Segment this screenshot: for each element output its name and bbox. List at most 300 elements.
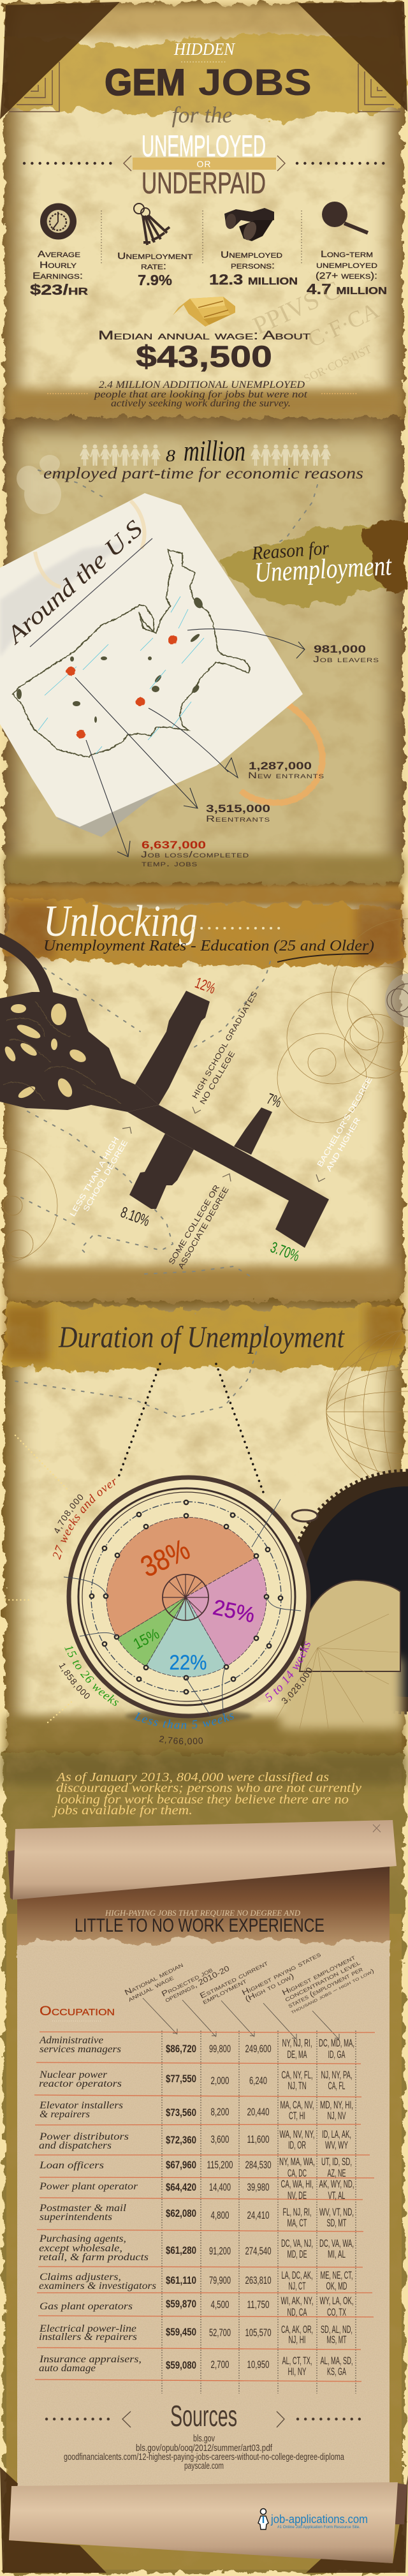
scroll left edge back — [8, 1850, 15, 1900]
row: administrative services managers: DC, MD, MA, — [319, 2037, 354, 2049]
heading: unlocking: Unlocking — [43, 897, 198, 946]
bar: 12 percent tooth — [135, 991, 210, 1105]
row: purchasing agents: 91,200 — [209, 2245, 231, 2257]
separators — [101, 211, 302, 263]
value: 3.70 percent: 3.70% — [268, 1239, 302, 1265]
heading: reason for: Reason for — [251, 538, 330, 564]
row: nuclear power reactor operators: CA, FL — [328, 2080, 346, 2092]
row: administrative services managers: 249,600 — [245, 2043, 272, 2055]
trail: dashed marks — [21, 961, 270, 1279]
row: nuclear power reactor operators: 6,240 — [249, 2075, 267, 2087]
stat: unemployment rate: Unemployment — [117, 251, 193, 262]
label: reentrants — [206, 803, 270, 824]
decoration: faint latin inscription: SOR·COS·IIST — [302, 343, 374, 385]
source list: bls.gov/opub/ooq/2012/summer/art03.pdf — [136, 2443, 273, 2454]
stat: average hourly earnings — [30, 249, 89, 298]
label: less than 5 weeks: Less than 5 weeks — [134, 1712, 234, 1729]
icon: people right — [251, 445, 331, 466]
row: nuclear power reactor operators: NJ, NY, PA, — [321, 2069, 352, 2081]
label: bachelor's degree: BACHELOR'S DEGREE — [315, 1076, 374, 1169]
label: new entrants: 1,287,000 — [249, 760, 312, 772]
row: insurance appraisers: $59,080 — [166, 2359, 196, 2371]
pie slice: 22 percent — [146, 1597, 226, 1677]
number: 8: 8 — [166, 447, 175, 465]
row: power distributors and dispatchers: WA, NV, NY, — [279, 2128, 315, 2140]
label: high school graduates: HIGH SCHOOL GRADUATES — [190, 989, 259, 1100]
row: power distributors and dispatchers: Power distributors — [39, 2131, 129, 2142]
row: insurance appraisers — [39, 2354, 353, 2378]
label: some college: SOME COLLEGE OR — [167, 1183, 221, 1266]
row: gas plant operators: Gas plant operators — [40, 2301, 133, 2312]
logo wordmark: job-applications.com — [270, 2513, 368, 2526]
row: purchasing agents: DC, VA, WA, — [319, 2237, 354, 2249]
trail: dashed marks — [15, 1321, 266, 1418]
column header: paying states — [240, 1950, 322, 2004]
row: claims adjusters: 263,810 — [245, 2274, 272, 2286]
decoration: left corner fold — [0, 2, 120, 119]
stat: long-term unemployed: 4.7 million — [307, 281, 387, 297]
decoration: globe grid — [326, 1330, 408, 1493]
row: gas plant operators: WY, LA, OK, — [320, 2295, 353, 2307]
label: reentrants: 3,515,000 — [206, 803, 270, 815]
title: underpaid: UNDERPAID — [142, 166, 266, 200]
column header: paying states: (High to low) — [244, 1971, 295, 2004]
row: power plant operator: Power plant operator — [39, 2181, 138, 2192]
divider: dotted right — [297, 162, 384, 165]
row: claims adjusters: LA, DC, AK, — [282, 2269, 312, 2281]
row: claims adjusters: 79,900 — [209, 2274, 231, 2286]
icon: gold bars — [173, 297, 235, 327]
note stain — [35, 501, 145, 587]
column header: wage: annual wage — [126, 1973, 175, 2004]
row: power distributors and dispatchers: 3,600 — [210, 2133, 229, 2145]
stat: long-term unemployed: unemployed — [316, 260, 377, 270]
title: hidden: HIDDEN — [173, 40, 236, 59]
row: purchasing agents: Purchasing agents, — [39, 2233, 126, 2244]
key bow — [0, 938, 159, 1112]
label: some college: ASSOCIATE DEGREE — [176, 1185, 231, 1271]
panel: unlocking education rates — [0, 897, 408, 1279]
row: postmaster and mail superintendents: superintendents — [40, 2212, 112, 2223]
row: insurance appraisers: 10,950 — [247, 2358, 269, 2371]
key bars chart — [0, 938, 329, 1248]
row: insurance appraisers: 2,700 — [210, 2358, 229, 2371]
row: claims adjusters: ME, NE, CT, — [320, 2269, 353, 2281]
stat: average hourly earnings: Average — [38, 249, 80, 260]
row: loan officers — [39, 2156, 352, 2179]
stat: unemployed persons: persons: — [231, 260, 275, 271]
column rules — [162, 2031, 356, 2394]
label: new entrants: New entrants — [248, 771, 324, 780]
panel: title header — [0, 2, 407, 200]
logo figure — [258, 2508, 268, 2529]
column header: openings: Projected job — [160, 1965, 214, 1999]
chevrons: label pointers — [122, 1107, 325, 1181]
panel: duration of unemployment — [4, 1321, 408, 1745]
stat: long-term unemployed: Long-term — [321, 249, 373, 260]
row: electrical power-line: installers & repairers — [39, 2332, 137, 2343]
row: loan officers: UT, ID, SD, — [321, 2156, 352, 2168]
decoration: right concentric squares — [358, 64, 400, 112]
column header: wage — [123, 1960, 185, 2004]
chevron: sources left — [122, 2411, 131, 2427]
column header: employment: employment — [201, 1976, 248, 2006]
column header: paying states: Highest paying states — [240, 1950, 322, 1997]
row: elevator installers and repairers: $73,560 — [166, 2106, 196, 2119]
heading: around the u.s: Around the U.S — [1, 515, 148, 650]
column header: occupation: Occupation — [40, 2004, 115, 2018]
bar: 7 percent tooth — [234, 1107, 272, 1155]
key shaft — [127, 1105, 329, 1248]
number: 43,500: $43,500 — [136, 339, 272, 373]
row: administrative services managers: 99,800 — [209, 2043, 231, 2055]
row: nuclear power reactor operators: 2,000 — [210, 2075, 229, 2087]
percent: 15: 15% — [131, 1625, 163, 1653]
source list — [64, 2433, 344, 2471]
panel: discouraged workers note: looking for work because they believe there are no — [57, 1793, 349, 1807]
arrow: new entrants — [149, 708, 238, 778]
panel: discouraged workers note — [52, 1770, 361, 1817]
percent: 25: 25% — [211, 1595, 257, 1627]
ground shadow — [125, 1710, 252, 1722]
column header: concentration: Highest employment — [280, 1952, 357, 1997]
row rules — [34, 2032, 375, 2381]
row: insurance appraisers: auto damage — [39, 2363, 96, 2374]
label: less than high school: LESS THAN A HIGH — [68, 1136, 121, 1218]
row: loan officers: NY, MA, WA, — [279, 2156, 315, 2168]
column header: openings: openings, 2010-20 — [163, 1964, 231, 2004]
label: 27 weeks and over: 4,708,000 — [55, 1494, 83, 1534]
chart: duration dial — [64, 1477, 309, 1716]
title: unemployed: UNEMPLOYED — [142, 129, 266, 163]
row: claims adjusters: Claims adjusters, — [40, 2272, 121, 2283]
trail: pale dots — [5, 1435, 350, 1722]
header arrows — [143, 1998, 339, 2039]
map: lakes and inland details — [17, 596, 205, 723]
heading: high paying: HIGH-PAYING JOBS THAT REQUIRE NO DEGREE AND — [105, 1908, 301, 1918]
chevron: sources right — [277, 2411, 284, 2427]
label: less than 5 weeks — [134, 1712, 234, 1745]
lobe: cream strap — [292, 1510, 317, 1521]
row: power plant operator: AK, WY, ND, — [319, 2178, 354, 2190]
row: insurance appraisers: AL, CT, TX, — [282, 2355, 312, 2367]
row: nuclear power reactor operators: reactor operators — [39, 2078, 122, 2089]
stat: unemployed persons: 12.3 million — [209, 271, 298, 288]
row: power distributors and dispatchers: ID, LA, AK, — [322, 2128, 351, 2140]
row: electrical power-line: CA, AK, OR, — [281, 2323, 313, 2335]
row: electrical power-line: MS, MT — [326, 2334, 347, 2346]
row: insurance appraisers: HI, NY — [288, 2365, 306, 2378]
pie slice: 38 percent — [106, 1517, 256, 1638]
row: insurance appraisers: AL, MA, SD, — [320, 2355, 353, 2367]
row: purchasing agents: MI, AL — [328, 2248, 346, 2260]
stat: average hourly earnings: $23/hr — [30, 281, 89, 298]
heading: million: million — [184, 434, 245, 467]
row: administrative services managers: Administrative — [39, 2035, 103, 2046]
row: elevator installers and repairers: NJ, NV — [328, 2110, 346, 2122]
row: power distributors and dispatchers: WV, WY — [325, 2139, 348, 2151]
stat: unemployment rate — [117, 251, 193, 288]
label: job loss — [141, 839, 249, 868]
decoration: compass rays — [274, 1614, 398, 1729]
divider: sources dots left — [47, 2418, 108, 2420]
row: postmaster and mail superintendents: Postmaster & mail — [39, 2203, 126, 2214]
percent: 22: 22% — [170, 1651, 207, 1674]
percent: 38: 38% — [136, 1532, 194, 1583]
row: electrical power-line: $59,450 — [166, 2326, 196, 2338]
heading: employed part-time: employed part-time for economic reasons — [43, 465, 363, 482]
stat: unemployed persons — [209, 249, 298, 288]
row: electrical power-line: 105,570 — [245, 2327, 272, 2339]
panel: discouraged workers note: discouraged workers; persons who are not currently — [56, 1781, 361, 1795]
note shadow — [56, 694, 303, 837]
row: nuclear power reactor operators: Nuclear power — [39, 2069, 108, 2080]
label: high school graduates: NO COLLEGE — [198, 1049, 237, 1106]
label: less than high school — [68, 1136, 129, 1218]
row: nuclear power reactor operators — [39, 2069, 352, 2092]
row: loan officers: Loan officers — [39, 2160, 104, 2171]
mask: paper below cog — [280, 1659, 402, 1729]
panel: around the u.s. — [0, 434, 408, 868]
row: administrative services managers: ID, GA — [328, 2048, 346, 2061]
decoration: right corner fold — [298, 2, 407, 112]
label: 27 weeks and over: 27 weeks and over — [53, 1479, 116, 1560]
divider: sources dots right — [298, 2418, 360, 2420]
row: postmaster and mail superintendents: MA, CT — [287, 2217, 307, 2229]
stat: average hourly earnings: Earnings: — [33, 270, 83, 281]
decoration: left concentric squares — [9, 62, 59, 112]
title: jobs: JOBS — [198, 62, 312, 103]
row: purchasing agents: 274,540 — [245, 2245, 272, 2257]
row: claims adjusters: examiners & investigators — [39, 2281, 156, 2291]
column header: concentration: states (employment per — [286, 1964, 364, 2010]
panel: key statistics — [30, 202, 387, 409]
note paper — [0, 493, 303, 827]
row: gas plant operators: ND, CA — [287, 2306, 307, 2318]
row: power distributors and dispatchers: $72,360 — [166, 2134, 196, 2146]
stat: long-term unemployed — [307, 249, 387, 297]
underline stroke — [277, 954, 368, 962]
panel: discouraged workers note: jobs available for them. — [52, 1803, 193, 1817]
row: claims adjusters — [39, 2269, 353, 2292]
stat: unemployment rate: rate: — [141, 261, 166, 272]
row: gas plant operators: CO, TX — [327, 2306, 346, 2318]
row: power plant operator: CA, WA, HI, — [280, 2178, 314, 2190]
bottom corner left — [0, 2467, 106, 2573]
heading: duration: Duration of Unemployment — [58, 1321, 345, 1354]
lobe: paper bump — [300, 1580, 400, 1671]
scroll sheet — [17, 1860, 390, 2488]
title: gem: GEM — [105, 62, 186, 103]
heading: education rates: Unemployment Rates - Education (25 and Older) — [43, 938, 374, 954]
row: electrical power-line: 52,700 — [209, 2327, 231, 2339]
row: administrative services managers: $86,720 — [166, 2043, 196, 2055]
panel: discouraged workers note: As of January 2013, 804,000 were classified as — [55, 1770, 329, 1784]
row: insurance appraisers: KS, GA — [327, 2365, 346, 2378]
stat: unemployed persons: Unemployed — [221, 249, 282, 260]
row: power distributors and dispatchers: ID, OR — [288, 2139, 306, 2151]
row: elevator installers and repairers: 8,200 — [210, 2106, 229, 2118]
scroll tear — [17, 1939, 390, 1958]
row: gas plant operators: 4,500 — [210, 2298, 229, 2311]
map: united states outline — [13, 550, 250, 757]
pointer: dotted right — [216, 1364, 264, 1494]
icon: pocket watch gear — [40, 203, 76, 240]
row: purchasing agents: DC, VA, NJ, — [281, 2237, 313, 2249]
label: bachelor's degree: AND HIGHER — [324, 1116, 362, 1173]
decoration: faint latin inscription: PPIVS C — [249, 275, 345, 340]
panel: scroll — [0, 1820, 408, 2573]
row: nuclear power reactor operators: NJ, TN — [288, 2080, 306, 2092]
note shading — [0, 542, 127, 657]
row: gas plant operators: $59,870 — [166, 2298, 196, 2310]
label: 5 to 14 weeks: 3,028,000 — [282, 1668, 312, 1703]
pointer: dotted left — [119, 1364, 160, 1477]
decoration: faint latin inscription: C·F·CA — [303, 297, 382, 352]
divider: pale dots — [194, 927, 280, 929]
column header: employment — [198, 1958, 270, 2006]
row: elevator installers and repairers — [39, 2099, 353, 2122]
row: postmaster and mail superintendents: FL, NJ, RI, — [283, 2206, 311, 2218]
row: postmaster and mail superintendents — [39, 2203, 354, 2229]
chevron: right — [277, 156, 285, 171]
trail: dashed right — [226, 485, 317, 572]
row: purchasing agents: $61,280 — [166, 2244, 196, 2256]
label: 15 to 26 weeks: 1,858,000 — [59, 1663, 90, 1699]
row: electrical power-line: NJ, HI — [288, 2334, 306, 2346]
arrow: reentrants — [75, 677, 198, 808]
row: power plant operator — [39, 2178, 354, 2202]
label: 15 to 26 weeks: 15 to 26 weeks — [64, 1646, 119, 1706]
bottom roll back — [395, 2483, 407, 2524]
row: electrical power-line: Electrical power-line — [39, 2323, 136, 2334]
icon: bunch of keys — [134, 204, 170, 245]
row: postmaster and mail superintendents: 4,800 — [210, 2209, 229, 2221]
label: job leavers: 981,000 — [314, 643, 366, 655]
row: loan officers: CA, DC — [288, 2167, 307, 2179]
icon: people left — [80, 445, 161, 466]
row: purchasing agents: retail, & farm products — [39, 2252, 149, 2263]
row: elevator installers and repairers: CT, HI — [289, 2110, 305, 2122]
scroll sheet shading — [17, 1863, 390, 1946]
cog: navy disc — [303, 1486, 408, 1697]
label: bachelor's degree — [315, 1076, 374, 1173]
row: elevator installers and repairers: Elevator installers — [39, 2100, 123, 2111]
column header: concentration — [280, 1952, 375, 2015]
label: job leavers: Job leavers — [313, 655, 379, 664]
decoration: geometric circles — [0, 919, 408, 1263]
row: postmaster and mail superintendents: SD, MT — [326, 2217, 347, 2229]
label: job leavers — [313, 643, 379, 664]
stat: unemployment rate: 7.9% — [138, 272, 172, 288]
hub wheel — [163, 1574, 208, 1620]
row: postmaster and mail superintendents: WV, VT, ND, — [319, 2206, 354, 2218]
row: postmaster and mail superintendents: $62,080 — [166, 2207, 196, 2219]
row: administrative services managers: DE, MA — [287, 2048, 307, 2061]
row: electrical power-line — [39, 2323, 353, 2346]
column header: concentration: concentration level — [283, 1957, 362, 2004]
cog: dark gear — [288, 1472, 408, 1712]
row: gas plant operators — [40, 2295, 353, 2318]
row: electrical power-line: SD, AL, ND, — [321, 2323, 353, 2335]
column header: wage: National median — [123, 1960, 185, 1997]
decoration: orange dots — [48, 393, 357, 394]
heading: little to no work experience: LITTLE TO NO WORK EXPERIENCE — [75, 1915, 324, 1936]
map: red markers — [66, 635, 177, 739]
value: 7 percent: 7% — [265, 1090, 284, 1111]
label: less than high school: SCHOOL DEGREE — [81, 1139, 129, 1213]
row: power plant operator: 39,980 — [247, 2181, 269, 2193]
ring nodes — [90, 1500, 282, 1694]
heading: sources: Sources — [170, 2399, 237, 2432]
scroll paper grain — [17, 1946, 390, 2488]
label: 5 to 14 weeks: 5 to 14 weeks — [265, 1641, 310, 1702]
row: elevator installers and repairers: 20,440 — [247, 2106, 269, 2118]
source list: bls.gov — [193, 2433, 215, 2444]
column header: employment: Estimated current — [198, 1958, 270, 2001]
row: gas plant operators: 11,750 — [247, 2298, 269, 2311]
row: elevator installers and repairers: MD, NY, HI, — [320, 2099, 353, 2111]
row: purchasing agents — [39, 2233, 354, 2263]
divider: dotted line under hidden — [182, 61, 226, 63]
note: additional unemployed: 2.4 MILLION ADDITIONAL UNEMPLOYED — [99, 380, 305, 390]
label: job loss: 6,637,000 — [142, 839, 206, 851]
row: power plant operator: NV, DE — [288, 2189, 307, 2202]
column header: openings — [160, 1964, 231, 2004]
label: job loss: temp. jobs — [142, 859, 198, 868]
wash: reason heading stain — [220, 522, 408, 606]
stat: long-term unemployed: (27+ weeks): — [316, 270, 377, 281]
row: power distributors and dispatchers: 11,600 — [247, 2133, 269, 2145]
dial rings — [78, 1488, 295, 1705]
label: some college — [167, 1183, 231, 1271]
row: purchasing agents: except wholesale, — [39, 2243, 122, 2254]
row: loan officers: AZ, NE — [328, 2167, 346, 2179]
row: claims adjusters: $61,110 — [166, 2274, 196, 2286]
header underline — [52, 2020, 102, 2022]
decoration: faint latin inscription — [249, 275, 382, 385]
row: nuclear power reactor operators: $77,550 — [166, 2073, 196, 2085]
arrow: job leavers — [187, 629, 305, 658]
divider: dotted left — [24, 162, 111, 165]
row: elevator installers and repairers: & repairers — [40, 2109, 90, 2120]
decoration: coffee ring — [241, 704, 323, 803]
label: reentrants: Reentrants — [206, 814, 270, 824]
row: claims adjusters: OK, MD — [326, 2280, 347, 2292]
column header: concentration: thousand jobs – high to low) — [289, 1967, 375, 2015]
row: administrative services managers: NY, NJ, RI, — [282, 2037, 312, 2049]
row: loan officers: 284,530 — [245, 2159, 272, 2171]
title: for the: for the — [172, 102, 233, 128]
arrow: job loss — [86, 740, 130, 857]
icon: binoculars — [224, 208, 274, 242]
bar: 8.1 percent tooth — [129, 1134, 194, 1209]
decoration: rosette disc — [385, 973, 408, 1027]
trail: dashed left — [38, 470, 104, 498]
title: or: OR — [196, 159, 212, 169]
chevron: left — [124, 156, 131, 171]
row: administrative services managers: services managers — [40, 2044, 121, 2055]
row: power distributors and dispatchers: and dispatchers — [39, 2140, 112, 2151]
label: less than 5 weeks: 2,766,000 — [159, 1736, 203, 1745]
row: power plant operator: 14,400 — [209, 2181, 231, 2193]
row: insurance appraisers: Insurance appraisers, — [39, 2354, 142, 2365]
bottom roll — [9, 2482, 398, 2563]
row: loan officers: $67,960 — [166, 2159, 196, 2171]
map: blue grid ticks — [38, 596, 204, 754]
pie slice: 15 percent — [117, 1597, 186, 1666]
source list: payscale.com — [184, 2461, 224, 2471]
